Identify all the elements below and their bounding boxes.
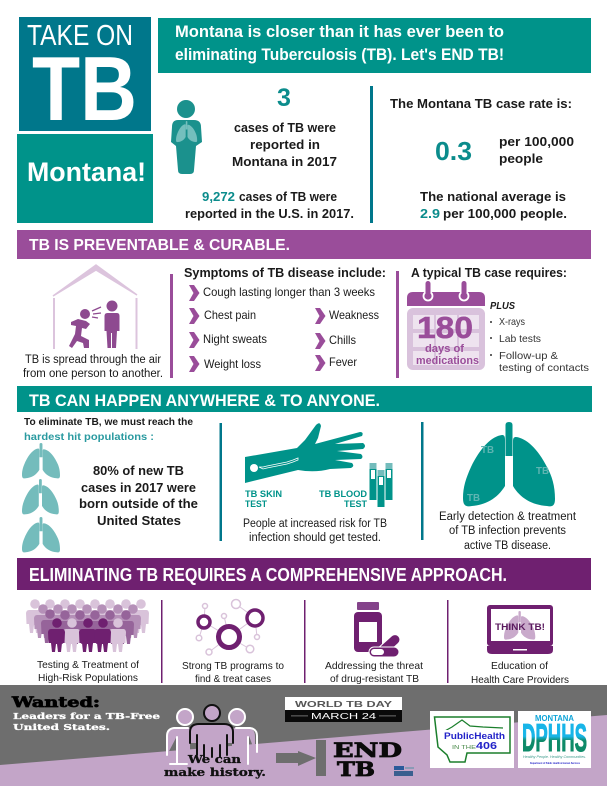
text: how TB spreads [23, 354, 163, 380]
text: testing and treatment [37, 659, 139, 684]
text: END TB [333, 738, 402, 781]
stat: 9,272 US cases: 9,272 [202, 189, 235, 204]
header banner [158, 18, 591, 73]
icon: three leaders [167, 705, 257, 764]
list: plus requirements [490, 300, 589, 374]
text: END TB: TB [337, 757, 375, 781]
text: people at risk should be tested: infection should get tested. [249, 532, 381, 544]
text: wanted leaders: Wanted: [11, 695, 100, 711]
stat: Montana case rate: per 100,000 [499, 134, 574, 149]
panel: Take On TB logo: TB [32, 39, 137, 140]
text: drug-resistant TB: Addressing the threat [325, 660, 423, 672]
list: symptoms of TB: Weight loss [204, 357, 261, 371]
stat: Montana case rate: people [499, 151, 543, 166]
text: hardest hit populations: hardest hit populations : [24, 431, 154, 443]
stat: Montana case rate: 0.3 [435, 136, 472, 166]
logo: Public Health in the 406 [430, 711, 514, 768]
stat: 80 percent born outside US: born outside of the [79, 496, 198, 511]
logo: Montana DPHHS [518, 711, 591, 768]
header banner: eliminating Tuberculosis (TB). Let's END TB! [175, 45, 504, 64]
list: symptoms of TB: Fever [329, 355, 357, 369]
list: symptoms of TB: Symptoms of TB disease include: [184, 265, 386, 280]
text: early detection: of TB infection prevents [449, 525, 566, 537]
logo: Public Health in the 406: PublicHealth [444, 731, 505, 742]
text: we can make history: make history. [164, 766, 266, 779]
icon: arm with skin test [245, 423, 365, 483]
stat: 9,272 US cases [185, 189, 354, 221]
stat: Montana case rate: The Montana TB case rate is: [390, 96, 572, 111]
badge: World TB Day: WORLD TB DAY [295, 699, 392, 709]
panel: Take On TB logo: TAKE ON [27, 20, 133, 52]
text: education of providers: Education of [491, 660, 548, 672]
badge: World TB Day [285, 697, 402, 722]
stat: 3 cases in Montana: cases of TB were [234, 120, 336, 135]
text: hardest hit populations [24, 416, 193, 443]
text: we can make history: We can [187, 753, 241, 766]
text: testing and treatment: High-Risk Populations [38, 672, 138, 684]
heading: TB can happen anywhere: TB CAN HAPPEN ANYWHERE & TO ANYONE. [29, 391, 380, 410]
list: plus requirements: X-rays [499, 316, 525, 328]
text: education of providers: Health Care Providers [471, 674, 569, 686]
heading: TB can happen anywhere [17, 386, 592, 412]
stat: 3 cases in Montana: Montana in 2017 [232, 154, 337, 169]
label: TB blood test [319, 489, 367, 510]
label: TB blood test: TB BLOOD [319, 489, 367, 500]
stat: national average: 2.9 [420, 206, 440, 221]
heading: comprehensive approach [17, 558, 591, 590]
text: END TB: END [333, 738, 402, 762]
icon: pill bottle [354, 602, 402, 657]
list: symptoms of TB: Weakness [329, 308, 379, 322]
panel: Montana [17, 134, 153, 223]
icon: small agency logo [394, 766, 414, 776]
arrow [276, 740, 326, 776]
heading: TB is preventable and curable [17, 230, 591, 259]
text: early detection: active TB disease. [464, 540, 551, 552]
icon: large lungs with TB: TB [481, 445, 494, 456]
icon: calendar 180 days: days of [425, 343, 464, 355]
text: education of providers [471, 660, 569, 686]
stat: 80 percent born outside US: 80% of new TB [93, 463, 184, 478]
icon: blood test tubes [370, 463, 392, 507]
stat: 80 percent born outside US: United States [97, 513, 181, 528]
text: strong TB programs: Strong TB programs to [182, 660, 284, 672]
text: people at risk should be tested [243, 518, 387, 544]
icon: three lungs [22, 443, 60, 552]
logo: Public Health in the 406: IN THE [452, 745, 476, 751]
stat: 3 cases in Montana: 3 [277, 84, 291, 112]
stat: 9,272 US cases: cases of TB were [239, 189, 337, 204]
heading: TB is preventable and curable: TB IS PREVENTABLE & CURABLE. [29, 237, 290, 254]
icon: large lungs with TB: TB [536, 466, 549, 477]
logo: Montana DPHHS: Healthy People. Healthy Communities. [523, 754, 586, 759]
stat: national average [420, 189, 567, 221]
icon: laptop Think TB: THINK TB! [495, 622, 545, 633]
icon: coughing people in house [53, 265, 138, 349]
panel: footer background [0, 685, 607, 786]
text: strong TB programs: find & treat cases [195, 673, 271, 685]
label: TB skin test [245, 489, 282, 510]
logo: Montana DPHHS: MONTANA [535, 714, 574, 723]
panel: Montana: Montana! [27, 157, 146, 187]
text: drug-resistant TB [325, 660, 423, 685]
text: how TB spreads: TB is spread through the air [25, 354, 161, 366]
stat: 3 cases in Montana [232, 84, 337, 169]
text: wanted leaders: United States. [13, 723, 110, 733]
text: hardest hit populations: To eliminate TB, we must reach the [24, 416, 193, 428]
list: plus requirements: PLUS [490, 300, 515, 312]
list: symptoms of TB: Chills [329, 333, 356, 347]
list: plus requirements: Follow-up & [499, 350, 558, 362]
icon: laptop Think TB [487, 605, 553, 654]
icon: large lungs with TB: TB [467, 493, 480, 504]
icon: large lungs with TB [463, 422, 555, 506]
stat: 9,272 US cases: reported in the U.S. in 2017. [185, 206, 354, 221]
list: symptoms of TB [184, 265, 386, 372]
text: early detection [439, 511, 577, 552]
icon: calendar 180 days [407, 281, 485, 370]
list: plus requirements: testing of contacts [499, 362, 589, 374]
icon: calendar 180 days: 180 [417, 310, 473, 345]
heading: typical TB case: A typical TB case requires: [411, 265, 567, 280]
icon: person with lungs [171, 100, 202, 174]
header banner: Montana is closer than it has ever been to [175, 22, 504, 41]
list: symptoms of TB: Cough lasting longer than 3 weeks [203, 285, 375, 299]
label: TB skin test: TEST [245, 499, 267, 510]
icon: population group [26, 599, 149, 652]
text: drug-resistant TB: of drug-resistant TB [330, 673, 419, 685]
icon: network of programs [196, 600, 263, 655]
stat: 3 cases in Montana: reported in [250, 137, 320, 152]
label: TB blood test: TEST [344, 499, 367, 510]
logo: Montana DPHHS: Department of Public Health & Human Services [530, 762, 581, 765]
badge: World TB Day: MARCH 24 [311, 712, 377, 721]
text: strong TB programs [182, 660, 284, 685]
list: symptoms of TB: Night sweats [203, 332, 267, 346]
stat: national average: The national average is [420, 189, 566, 204]
icon: calendar 180 days: medications [416, 355, 479, 367]
stat: Montana case rate [390, 96, 574, 166]
logo: Public Health in the 406: 406 [476, 741, 498, 752]
heading: comprehensive approach: ELIMINATING TB REQUIRES A COMPREHENSIVE APPROACH. [29, 565, 507, 585]
text: we can make history [164, 753, 266, 779]
text: early detection: Early detection & treatment [439, 511, 577, 523]
text: wanted leaders [11, 695, 161, 733]
text: wanted leaders: Leaders for a TB-Free [13, 712, 161, 722]
text: testing and treatment: Testing & Treatment of [37, 659, 139, 671]
text: people at risk should be tested: People at increased risk for TB [243, 518, 387, 530]
stat: 80 percent born outside US: cases in 2017 were [81, 480, 196, 495]
text: how TB spreads: from one person to another. [23, 368, 163, 380]
list: symptoms of TB: Chest pain [204, 308, 256, 322]
list: plus requirements: Lab tests [499, 333, 541, 345]
stat: 80 percent born outside US [79, 463, 198, 528]
stat: national average: per 100,000 people. [443, 206, 567, 221]
label: TB skin test: TB SKIN [245, 489, 282, 500]
